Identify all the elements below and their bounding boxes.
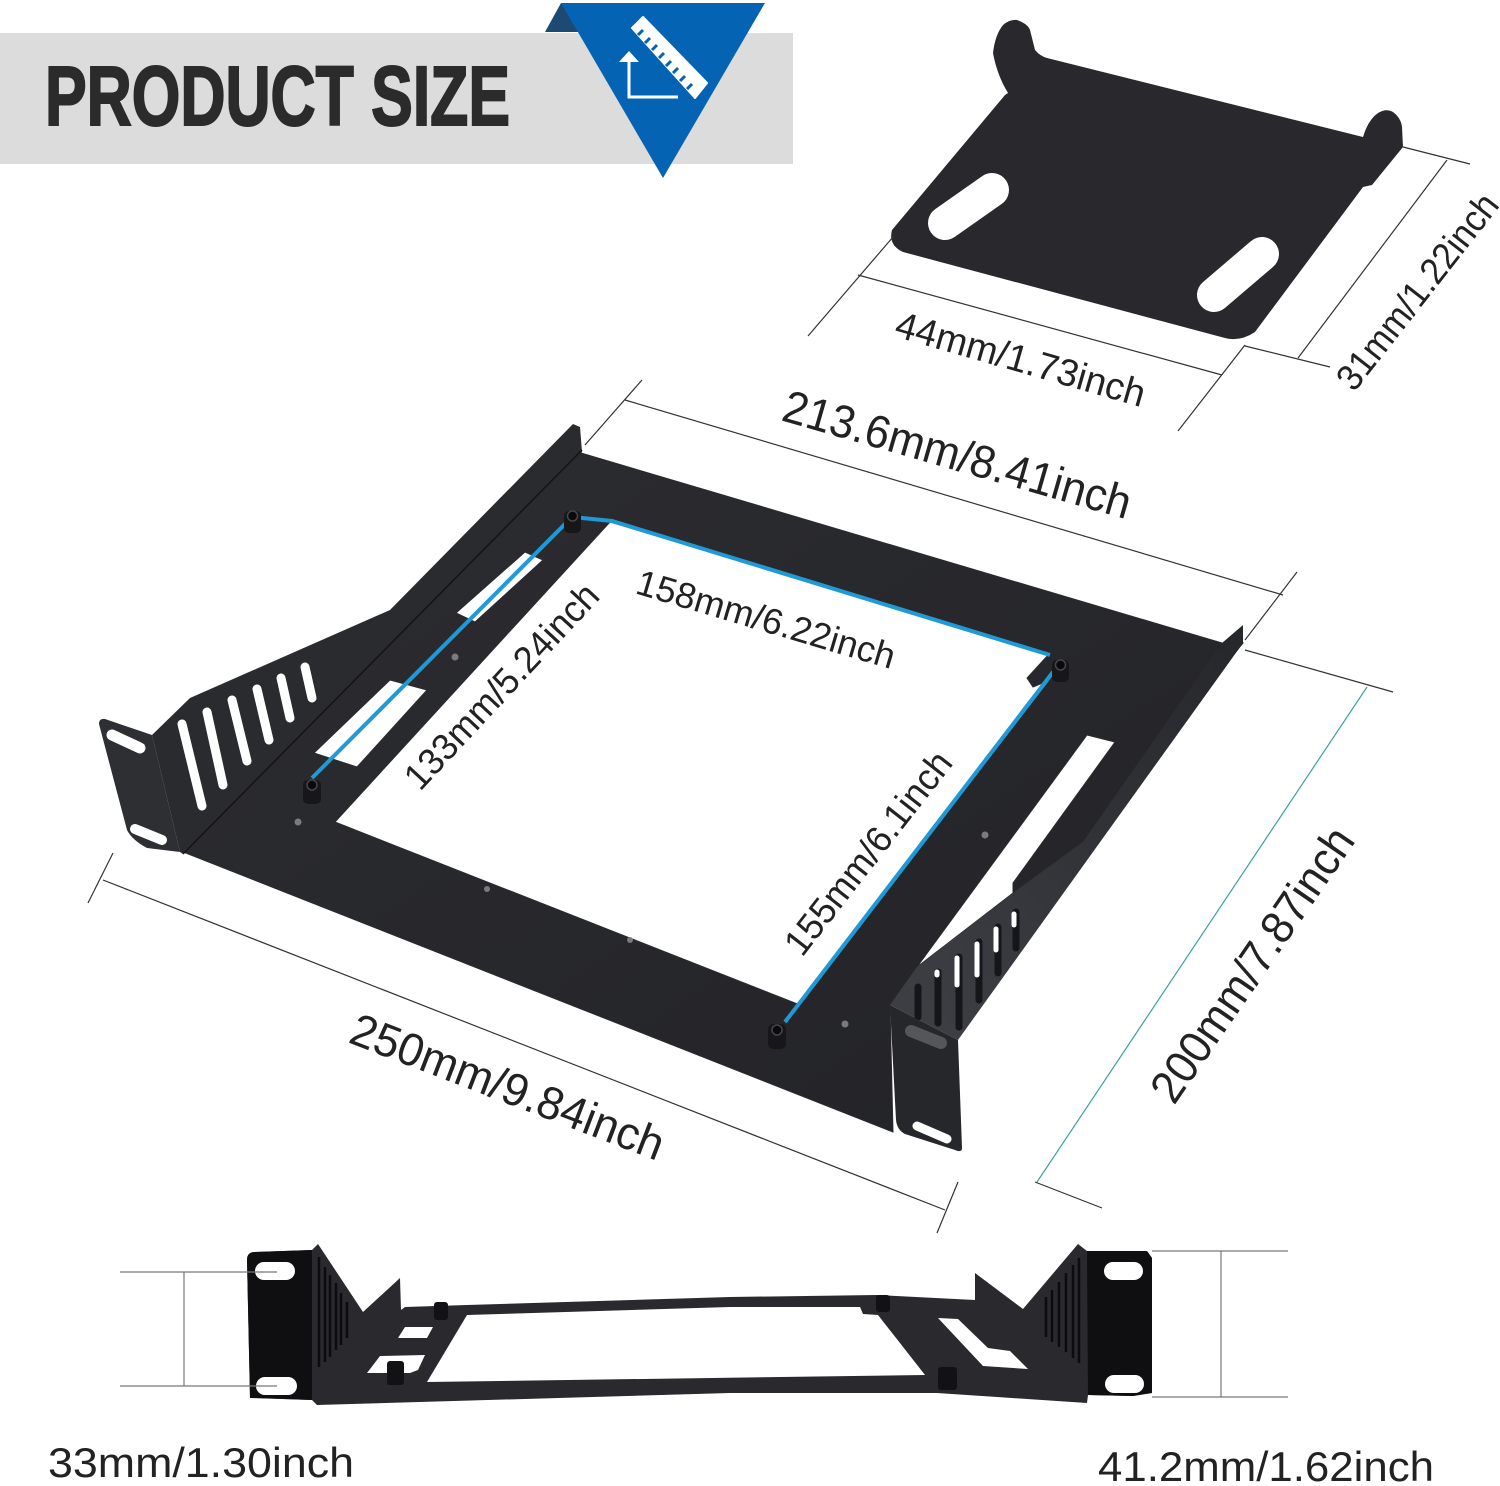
right ear holes (911, 1031, 947, 1139)
front standoffs (387, 1295, 957, 1390)
small mounting plate (891, 20, 1403, 339)
label: overall length: 250mm/9.84inch (343, 1003, 672, 1170)
title: PRODUCT SIZE (45, 49, 510, 143)
standoffs (303, 511, 1069, 1049)
dimension lines: front view heights (120, 1251, 1288, 1397)
label: overall inner width: 213.6mm/8.41inch (777, 380, 1138, 529)
front plate and flanges (247, 1244, 1152, 1405)
label: plate width: 44mm/1.73inch (891, 304, 1150, 416)
left ear (99, 719, 180, 852)
flange vents (319, 1257, 1079, 1367)
right ear (890, 1005, 962, 1151)
main plate (183, 453, 1243, 1132)
label: left standoff spacing: 133mm/5.24inch (396, 575, 607, 797)
left flange vents (112, 667, 312, 840)
label: right standoff spacing: 155mm/6.1inch (776, 743, 960, 963)
front ears (247, 1250, 1152, 1400)
label: depth: 200mm/7.87inch (1139, 817, 1365, 1112)
main bracket (99, 424, 1243, 1151)
right flange (890, 625, 1243, 1040)
dimension lines: main bracket (88, 380, 1393, 1233)
right flange vents (918, 912, 1016, 1027)
ear holes (264, 1271, 1135, 1386)
heading banner (0, 33, 793, 164)
front-view bracket (247, 1244, 1152, 1405)
dimension lines: small plate (808, 147, 1470, 431)
left flange (152, 424, 582, 854)
label: left height: 33mm/1.30inch (48, 1439, 354, 1486)
slots in small plate (945, 190, 1262, 295)
blue measurement lines (312, 517, 1053, 1022)
plate holes (294, 654, 988, 1028)
icon: blue ribbon triangle with ruler (545, 3, 765, 178)
label: standoff width: 158mm/6.22inch (632, 561, 900, 677)
